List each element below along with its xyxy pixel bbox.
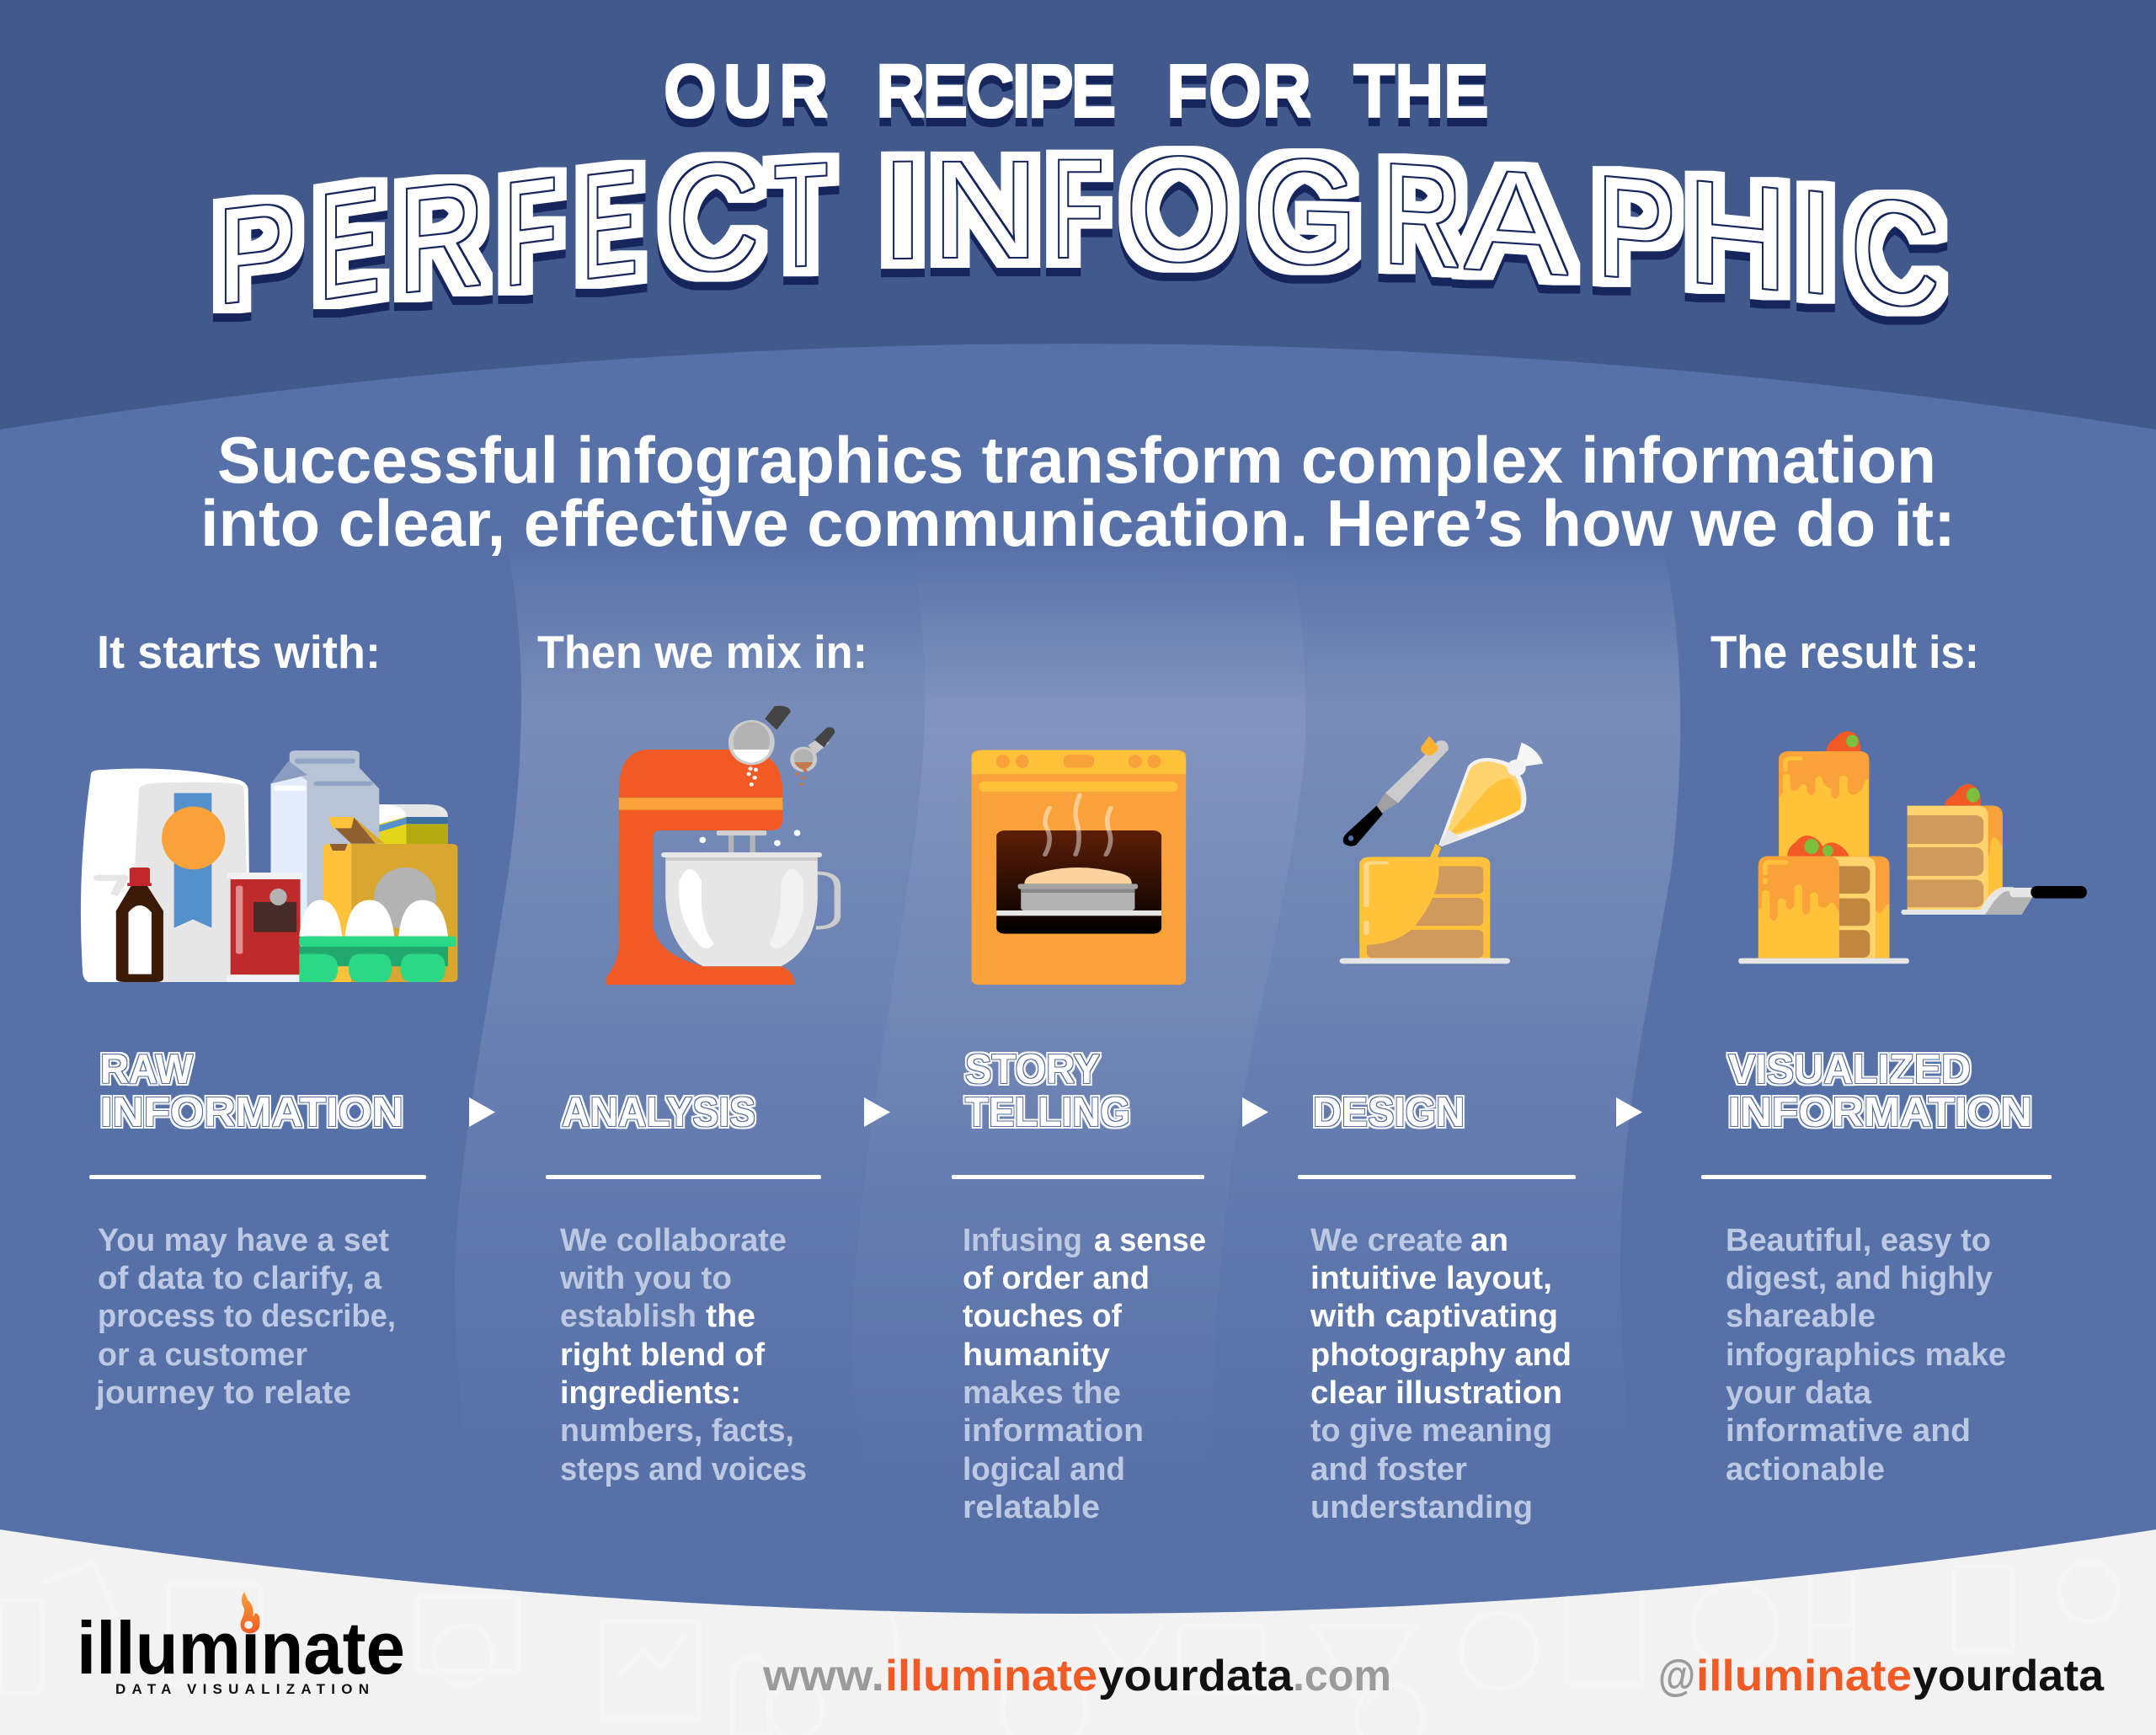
title: perfect infographic: T xyxy=(774,133,828,299)
body text: relatable xyxy=(963,1490,1100,1525)
icon: flame xyxy=(241,1592,260,1633)
title: perfect infographic: N xyxy=(931,132,1039,286)
social handle: @ xyxy=(1658,1652,1695,1700)
body text: logical and xyxy=(963,1452,1125,1487)
body text: touches of xyxy=(963,1299,1122,1334)
website url: www. xyxy=(762,1652,884,1700)
body text: humanity xyxy=(963,1337,1110,1373)
panel: analysis xyxy=(537,626,890,1487)
panel: story telling xyxy=(952,750,1268,1525)
divider rule xyxy=(1298,1175,1576,1179)
heading: story telling: STORY xyxy=(965,1047,1100,1092)
panel: raw information xyxy=(81,626,495,1411)
body text: with captivating xyxy=(1310,1299,1558,1334)
body text: establish xyxy=(560,1299,696,1334)
website url: .com xyxy=(1293,1652,1391,1700)
body text: with you to xyxy=(559,1261,732,1296)
top background band xyxy=(0,0,2156,590)
title: our recipe for the: RECIPE xyxy=(876,50,1117,132)
body text: right blend of xyxy=(560,1337,765,1373)
intro text: into clear, effective communication. Here’s how we do it: xyxy=(200,486,1956,560)
divider rule xyxy=(1701,1175,2052,1179)
footer band xyxy=(0,1529,2156,1735)
icon: finished cakes xyxy=(1738,731,2087,964)
icon: stand mixer xyxy=(606,706,837,985)
title: perfect infographic: I xyxy=(1799,160,1833,326)
logo: illuminate: illuminate xyxy=(77,1606,405,1690)
title: perfect infographic: C xyxy=(664,129,760,304)
panel: visualized information xyxy=(1701,626,2087,1487)
logo: illuminate: DATA VISUALIZATION xyxy=(115,1681,369,1697)
title: our recipe for the: OUR xyxy=(664,50,828,132)
body text xyxy=(1310,1223,1572,1525)
body text: informative and xyxy=(1726,1413,1971,1449)
body text xyxy=(1726,1223,2006,1487)
heading: design: DESIGN xyxy=(1313,1090,1465,1135)
body text: actionable xyxy=(1726,1452,1885,1487)
body text: intuitive layout, xyxy=(1310,1261,1552,1296)
body text: We create xyxy=(1310,1223,1463,1258)
body text: steps and voices xyxy=(560,1452,807,1487)
heading: raw information xyxy=(100,1047,403,1135)
body text: Infusing xyxy=(963,1223,1082,1258)
website url: illuminate xyxy=(885,1652,1097,1700)
label: then we mix in: Then we mix in: xyxy=(537,626,867,678)
heading: story telling xyxy=(965,1047,1130,1135)
body text: shareable xyxy=(1726,1299,1876,1334)
label: it starts with: It starts with: xyxy=(97,626,381,678)
social handle: illuminate xyxy=(1696,1652,1912,1700)
title: perfect infographic: P xyxy=(1596,147,1677,312)
intro text xyxy=(200,423,1956,560)
icon: ingredients xyxy=(81,750,457,982)
heading: story telling: TELLING xyxy=(965,1090,1130,1135)
label: the result is: The result is: xyxy=(1710,626,1979,678)
title: perfect infographic: P xyxy=(216,174,297,333)
body text: process to describe, xyxy=(98,1299,396,1334)
heading: raw information: INFORMATION xyxy=(100,1090,403,1135)
website url xyxy=(762,1652,1391,1700)
title: perfect infographic: O xyxy=(1126,125,1232,291)
body text: photography and xyxy=(1310,1337,1572,1373)
title: our recipe for the: THE xyxy=(1353,50,1489,132)
website url: yourdata xyxy=(1098,1652,1294,1700)
arrow xyxy=(864,1097,890,1127)
title: perfect infographic: R xyxy=(1383,134,1462,298)
body text: or a customer xyxy=(98,1337,307,1373)
intro text: Successful infographics transform complex information xyxy=(217,423,1936,497)
main blue panel xyxy=(0,344,2156,1684)
body text: clear illustration xyxy=(1310,1375,1562,1411)
heading: visualized information: INFORMATION xyxy=(1728,1090,2032,1135)
body text: to give meaning xyxy=(1310,1413,1552,1449)
title: our recipe for the: FOR xyxy=(1166,50,1311,132)
icon: oven xyxy=(972,750,1186,985)
body text: of order and xyxy=(963,1261,1150,1296)
arrow xyxy=(469,1097,495,1127)
heading: analysis: ANALYSIS xyxy=(562,1090,755,1135)
body text: infographics make xyxy=(1726,1337,2006,1373)
body text xyxy=(963,1223,1206,1525)
social handle xyxy=(1658,1652,2105,1700)
title: perfect infographic: R xyxy=(398,150,485,325)
title: perfect infographic: C xyxy=(1850,166,1940,341)
title: perfect infographic: F xyxy=(1053,131,1103,286)
panel: design xyxy=(1298,736,1642,1525)
title: perfect infographic: I xyxy=(878,132,927,288)
arrow xyxy=(1616,1097,1642,1127)
title: perfect infographic: H xyxy=(1687,150,1788,323)
body text: and foster xyxy=(1310,1452,1467,1487)
heading: raw information: RAW xyxy=(100,1047,194,1092)
body text: a sense xyxy=(1094,1223,1206,1258)
body text: makes the xyxy=(963,1375,1121,1411)
body text: digest, and highly xyxy=(1726,1261,1993,1296)
body text: an xyxy=(1470,1223,1508,1258)
divider rule xyxy=(546,1175,821,1179)
arrow xyxy=(1242,1097,1268,1127)
body text: your data xyxy=(1726,1375,1872,1411)
title: perfect infographic: A xyxy=(1465,139,1567,305)
social handle: yourdata xyxy=(1913,1652,2105,1700)
body text: information xyxy=(963,1413,1144,1449)
title: perfect infographic: F xyxy=(504,147,557,318)
body text: We collaborate xyxy=(560,1223,787,1258)
title: perfect infographic: E xyxy=(582,139,638,311)
body text: ingredients: xyxy=(560,1375,741,1411)
title: perfect infographic: E xyxy=(319,156,380,332)
divider rule xyxy=(89,1175,426,1179)
body text: You may have a set xyxy=(98,1223,389,1258)
body text: the xyxy=(706,1299,755,1334)
wavy light ribbon background xyxy=(455,547,1680,1541)
heading: visualized information: VISUALIZED xyxy=(1728,1047,1971,1092)
body text: Beautiful, easy to xyxy=(1726,1223,1991,1258)
body text: understanding xyxy=(1310,1490,1533,1525)
body text xyxy=(559,1223,807,1487)
divider rule xyxy=(952,1175,1204,1179)
heading: visualized information xyxy=(1728,1047,2032,1135)
title: our recipe for the xyxy=(664,50,1489,132)
title: perfect infographic: G xyxy=(1253,127,1358,296)
body text: journey to relate xyxy=(95,1375,351,1411)
body text: numbers, facts, xyxy=(560,1413,794,1449)
title: perfect infographic xyxy=(216,125,1940,341)
body text: of data to clarify, a xyxy=(98,1261,382,1296)
icon: cake being iced with spatula and piping bag xyxy=(1340,736,1543,964)
body text xyxy=(95,1223,396,1411)
